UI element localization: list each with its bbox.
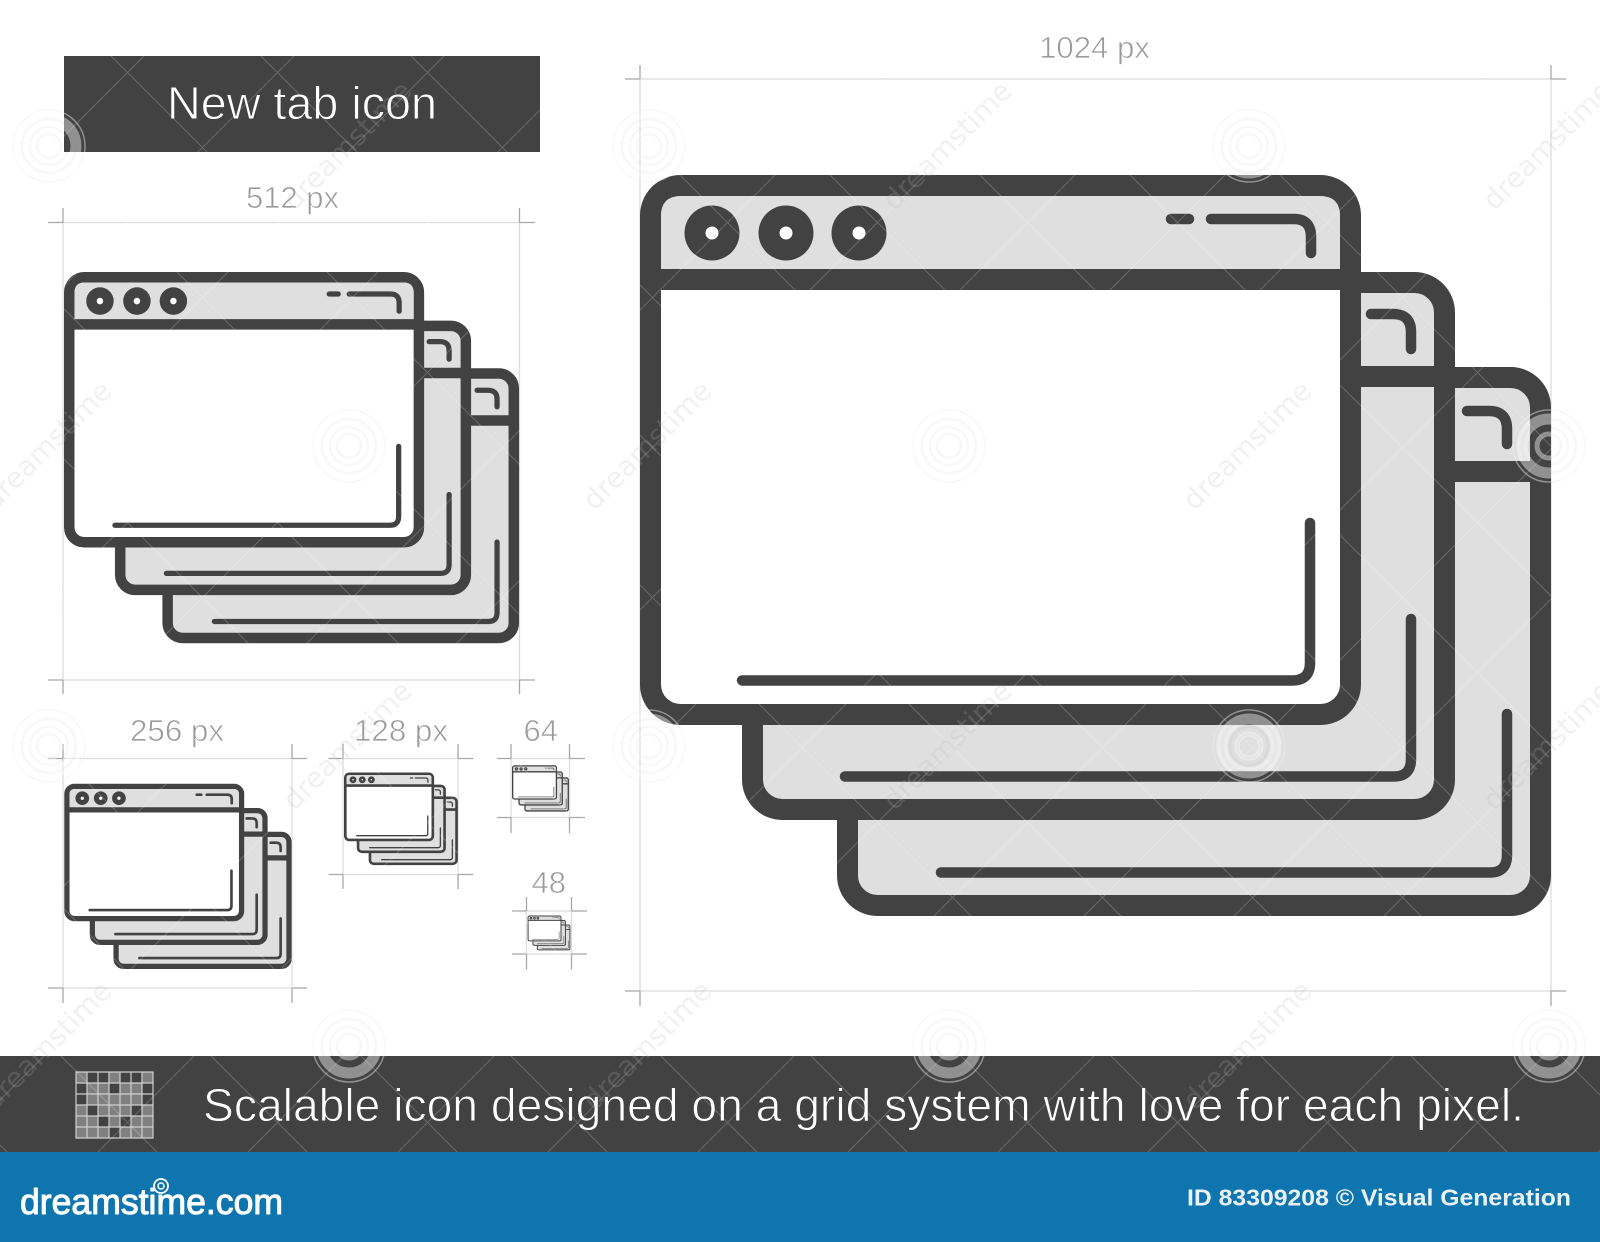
label: 512 px: 512 px <box>246 180 339 215</box>
watermark overlay: dreamstime <box>1176 374 1318 516</box>
watermark overlay: dreamstime <box>276 674 418 816</box>
image id and credit: ID 83309208 © Visual Generation <box>1187 1184 1571 1210</box>
watermark overlay: dreamstime <box>876 74 1018 216</box>
icon: pixel grid <box>76 1072 153 1138</box>
label: 1024 px: 1024 px <box>1039 30 1150 65</box>
watermark overlay: dreamstime <box>876 674 1018 816</box>
label: 64: 64 <box>524 713 558 748</box>
label: 48: 48 <box>532 865 566 900</box>
size guide: 48 <box>512 865 587 970</box>
size guide: 64 <box>497 713 585 833</box>
title: New tab icon <box>167 77 437 129</box>
caption text: Scalable icon designed on a grid system with love for each pixel. <box>203 1079 1524 1131</box>
label: 128 px: 128 px <box>354 713 449 748</box>
size guide: 256 px <box>48 713 307 1003</box>
icon: browser windows 512 px <box>69 277 514 638</box>
footer bar <box>0 1152 1600 1242</box>
logo: dreamstime.com: dreamstime.com <box>20 1181 283 1222</box>
caption bar <box>0 1056 1600 1152</box>
watermark overlay: dreamstime <box>276 74 418 216</box>
label: 256 px: 256 px <box>130 713 225 748</box>
watermark overlay: dreamstime <box>1176 974 1318 1116</box>
size guide: 128 px <box>328 713 474 889</box>
title bar <box>64 56 540 152</box>
watermark overlay: dreamstime <box>576 974 718 1116</box>
watermark overlay: dreamstime <box>576 374 718 516</box>
size guide: 512 px <box>48 180 535 694</box>
icon: browser windows 1024 px <box>650 186 1540 906</box>
icon: browser windows 256 px <box>67 786 289 966</box>
icon: browser windows 64 px <box>513 766 568 811</box>
icon: browser windows 128 px <box>345 774 457 864</box>
icon: browser windows 48 px <box>528 916 570 950</box>
